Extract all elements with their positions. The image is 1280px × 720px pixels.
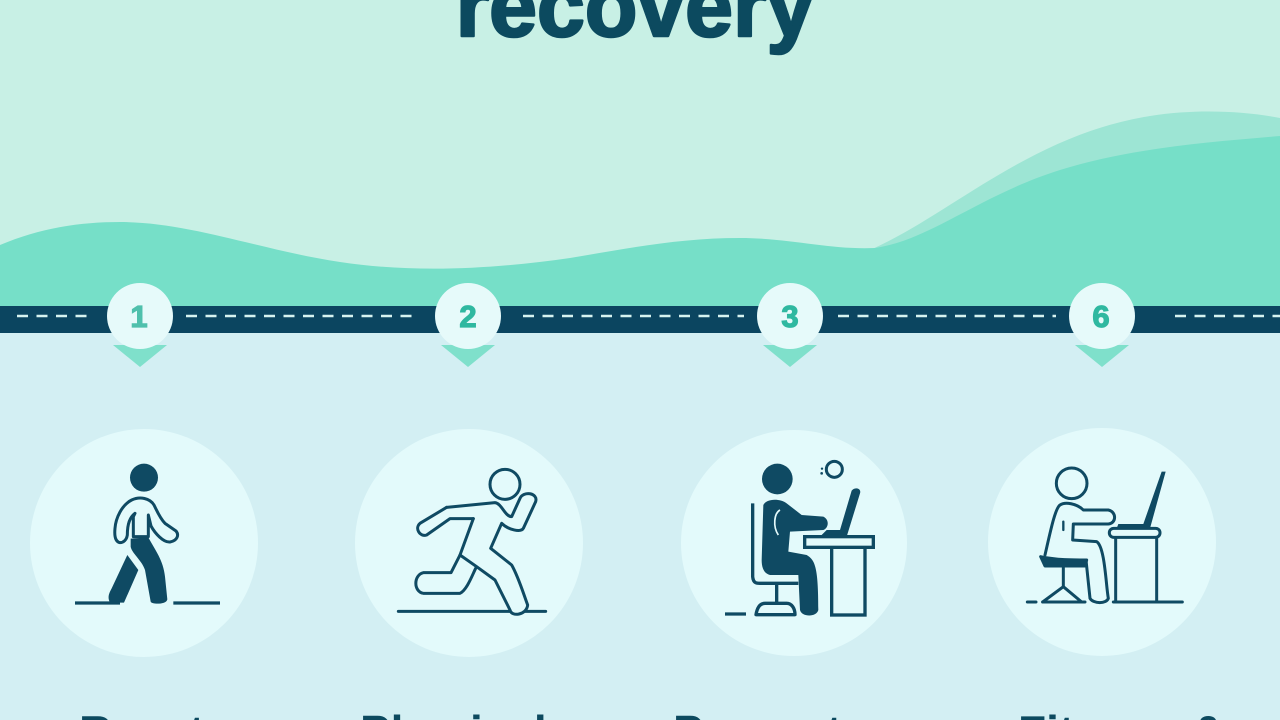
back hill [870, 112, 1280, 250]
step marker 3 [757, 283, 823, 367]
icon: person at desk with laptop, filled [725, 461, 873, 615]
step marker 6 [1069, 283, 1135, 367]
icon: walking person [75, 464, 220, 604]
step marker 2 [435, 283, 501, 367]
front hills [0, 136, 1280, 310]
step marker 6: 6 [1092, 299, 1110, 334]
icon circle 3 [681, 430, 907, 656]
icon circle 2 [355, 429, 583, 657]
sky background [0, 0, 1280, 310]
icon: running person [398, 469, 546, 614]
icon circle 4 [988, 428, 1216, 656]
lower background [0, 330, 1280, 720]
icon: person at desk with laptop, outline [1027, 468, 1182, 603]
icon circle 1 [30, 429, 258, 657]
step marker 2: 2 [459, 299, 477, 334]
step marker 1 [107, 283, 173, 367]
step marker 1: 1 [130, 299, 148, 334]
road [0, 306, 1280, 333]
step marker 3: 3 [781, 299, 799, 334]
